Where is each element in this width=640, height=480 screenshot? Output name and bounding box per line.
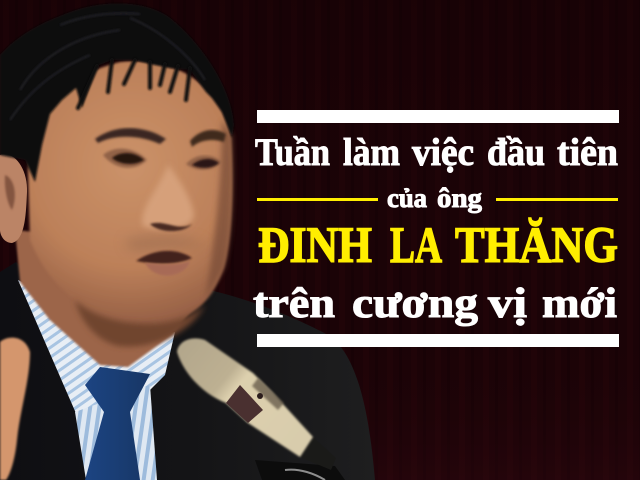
name heading — [258, 218, 618, 274]
hand — [0, 338, 30, 480]
left eye — [103, 149, 147, 168]
right yellow rule — [496, 198, 618, 201]
microphone — [177, 338, 345, 480]
heading line 3: mới — [542, 281, 617, 327]
heading line 1: việc — [412, 131, 474, 174]
heading line 1: làm — [343, 131, 400, 174]
face — [28, 61, 232, 324]
bottom white bar — [257, 334, 619, 347]
heading line 1: Tuần — [255, 131, 330, 174]
heading line 1 — [255, 131, 618, 174]
left eyebrow — [95, 128, 166, 144]
subheading — [387, 183, 483, 213]
heading line 3: cương — [352, 281, 478, 327]
shirt with striped collar — [18, 280, 175, 480]
tie — [85, 367, 150, 480]
name heading: THĂNG — [455, 218, 618, 274]
hair — [0, 3, 234, 182]
heading line 3 — [253, 281, 617, 327]
left yellow rule — [257, 198, 378, 201]
name heading: LA — [390, 218, 442, 274]
top white bar — [257, 110, 619, 123]
ear — [0, 154, 27, 243]
mouth — [136, 251, 192, 276]
heading line 1: tiên — [557, 131, 618, 174]
heading line 1: đầu — [487, 131, 545, 174]
subheading: ông — [437, 183, 483, 213]
suit jacket — [0, 262, 375, 480]
right eyebrow — [190, 130, 226, 147]
nose — [142, 165, 194, 231]
chin shadow — [75, 300, 205, 347]
name heading: ĐINH — [258, 218, 372, 274]
heading line 3: vị — [488, 281, 527, 327]
photo: speaker at microphone — [0, 3, 375, 480]
upper lip stubble — [125, 235, 205, 251]
subheading: của — [387, 183, 427, 213]
right cheek shading — [205, 120, 233, 300]
neck — [15, 230, 215, 367]
right eye — [186, 155, 222, 170]
heading line 3: trên — [253, 281, 335, 327]
